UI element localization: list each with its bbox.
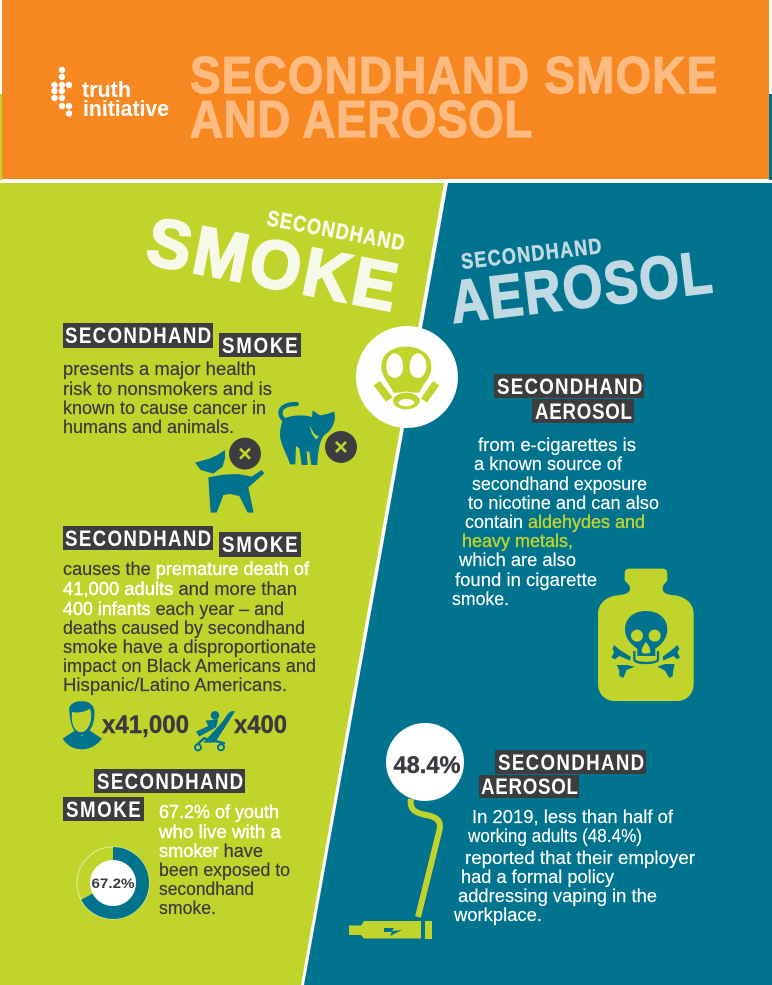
logo: truth [82, 77, 131, 102]
icon: adult [63, 701, 102, 749]
text block: premature deaths: impact on Black Americans and [63, 656, 316, 676]
text block: aerosol sources: contain aldehydes and [465, 512, 645, 532]
text block: youth exposure: secondhand [159, 879, 254, 899]
heading: secondhand smoke: SMOKE [141, 204, 403, 326]
text block: youth exposure: been exposed to [159, 860, 290, 880]
text block: smoke risk: humans and animals. [63, 417, 234, 437]
icon: vape with cable [349, 799, 440, 939]
text block: premature deaths: smoke have a disproportionate [63, 637, 316, 657]
text block: premature deaths: deaths caused by secondhand [63, 618, 305, 638]
text block: aerosol sources: found in cigarette [455, 570, 597, 590]
text block: aerosol sources: smoke. [452, 589, 509, 609]
text block: workplace policy: reported that their employer [465, 848, 695, 868]
text block: smoke risk [63, 323, 301, 437]
label: secondhand aerosol [479, 750, 646, 799]
title [190, 47, 717, 149]
text block: smoke risk: known to cause cancer in [63, 398, 266, 418]
label: secondhand smoke: SECONDHAND [65, 528, 211, 551]
icon: cat [280, 404, 357, 465]
text block: aerosol sources: heavy metals, [462, 531, 573, 551]
text block: premature deaths [63, 526, 316, 695]
label: secondhand smoke: SECONDHAND [97, 771, 243, 794]
stat: 41,000 adults: x41,000 [102, 711, 189, 739]
label: secondhand aerosol: AEROSOL [535, 401, 632, 424]
text block: workplace policy: In 2019, less than half of [472, 807, 674, 827]
text block: aerosol sources: which are also [458, 550, 576, 570]
text block: youth exposure [63, 769, 290, 918]
icon: poison bottle [598, 569, 694, 701]
text block: workplace policy: addressing vaping in the [458, 886, 657, 906]
header panel [2, 0, 769, 179]
label: secondhand smoke: SECONDHAND [65, 325, 211, 348]
label: secondhand smoke: SMOKE [222, 335, 298, 358]
text block: premature deaths: 400 infants each year – and [63, 599, 284, 619]
text block: aerosol sources: a known source of [474, 454, 623, 474]
text block: smoke risk: presents a major health [63, 359, 256, 379]
icon: dog [195, 438, 264, 513]
icon: stroller [195, 711, 235, 750]
donut chart: 67.2%: 67.2% [92, 875, 135, 891]
logo [51, 67, 169, 121]
panel: smoke background [0, 183, 444, 985]
heading: secondhand smoke: SECONDHAND [265, 207, 406, 256]
text block: premature deaths: causes the premature death of [63, 559, 310, 579]
text block: youth exposure: 67.2% of youth [159, 802, 279, 822]
logo: initiative [83, 96, 169, 121]
text block: youth exposure: who live with a [158, 822, 282, 842]
label: secondhand smoke: SMOKE [222, 534, 298, 557]
label: secondhand aerosol: SECONDHAND [497, 376, 642, 399]
title: AND AEROSOL [190, 91, 532, 149]
text block: premature deaths: 41,000 adults and more than [63, 579, 297, 599]
label: secondhand aerosol: SECONDHAND [498, 752, 644, 775]
title: SECONDHAND SMOKE [190, 47, 717, 105]
text block: youth exposure: smoker have [159, 841, 263, 861]
donut chart: 67.2% [77, 847, 149, 919]
text block: aerosol sources: secondhand exposure [472, 474, 647, 494]
text block: aerosol sources: to nicotine and can also [468, 493, 659, 513]
text block: workplace policy: working adults (48.4%) [467, 826, 642, 846]
text block: workplace policy [453, 750, 695, 925]
text block: aerosol sources: from e-cigarettes is [478, 435, 636, 455]
text block: workplace policy: workplace. [453, 905, 542, 925]
text block: youth exposure: smoke. [159, 898, 216, 918]
panel: aerosol background [304, 183, 772, 985]
label: secondhand aerosol [494, 374, 644, 424]
stat circle: 48.4%: 48.4% [394, 752, 460, 779]
stat: 400 infants: x400 [234, 711, 287, 739]
text block: aerosol sources [452, 374, 659, 609]
label: secondhand smoke [63, 769, 245, 822]
label: secondhand aerosol: AEROSOL [481, 776, 578, 799]
heading: secondhand aerosol: AEROSOL [447, 238, 715, 336]
label: secondhand smoke [63, 526, 301, 557]
text block: workplace policy: had a formal policy [461, 867, 614, 887]
text block: smoke risk: risk to nonsmokers and is [63, 379, 272, 399]
heading: secondhand aerosol: SECONDHAND [460, 235, 603, 274]
text block: premature deaths: Hispanic/Latino Americans. [63, 675, 287, 695]
stat circle: 48.4% [386, 723, 464, 801]
label: secondhand smoke [63, 323, 301, 358]
icon: gas mask [356, 326, 458, 428]
label: secondhand smoke: SMOKE [66, 799, 141, 822]
